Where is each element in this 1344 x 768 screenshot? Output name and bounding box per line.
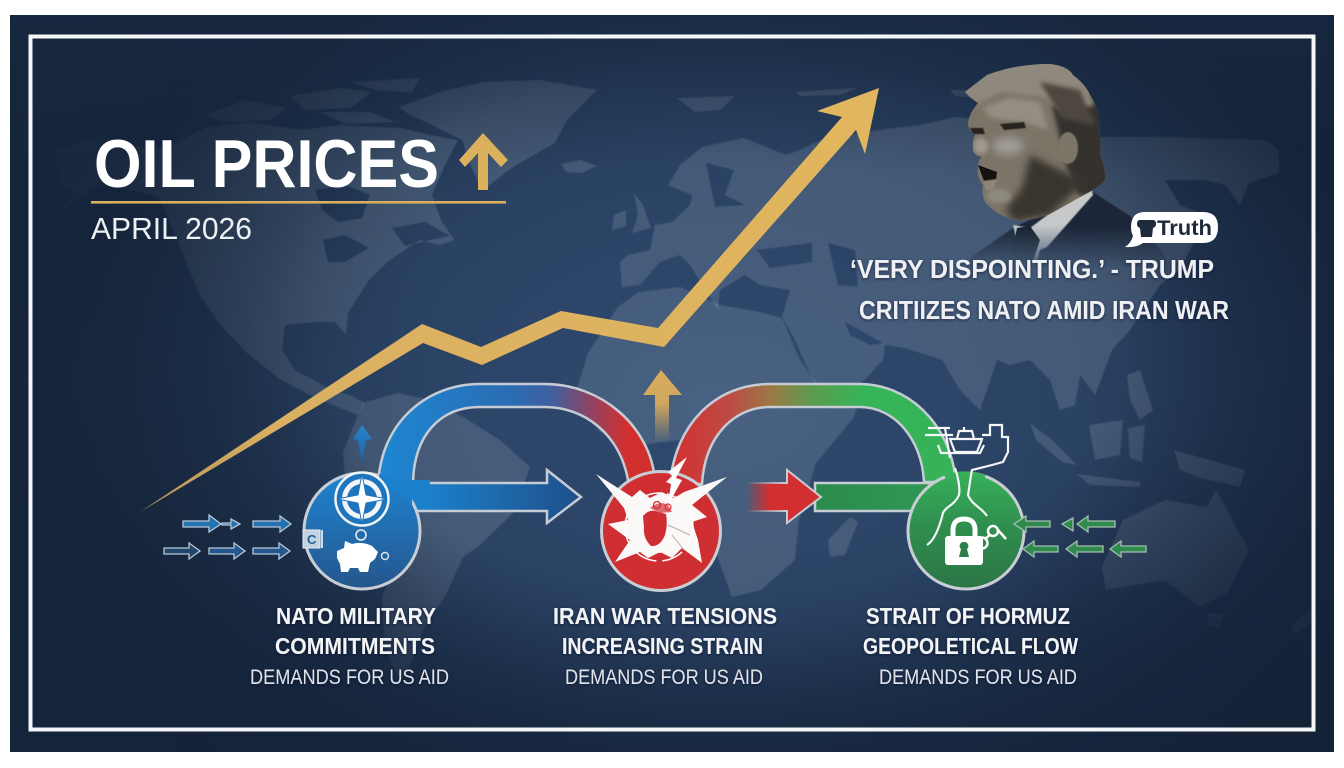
arctic islands [205, 78, 420, 124]
label: hormuz [863, 603, 1078, 689]
arrow: blue upward [353, 425, 372, 464]
nose highlight [974, 138, 988, 154]
social badge: truth [1125, 212, 1218, 247]
label: nato: DEMANDS FOR US AID [250, 666, 449, 689]
label: nato: NATO MILITARY [276, 603, 436, 629]
flow: nato to iran [378, 384, 655, 523]
forehead highlight [982, 98, 1048, 130]
icon: ship and drone routes [925, 425, 1008, 545]
node: nato [303, 472, 420, 589]
southeast asia islands [1030, 370, 1245, 487]
cheek highlight [993, 137, 1023, 155]
flow: iran to hormuz [670, 384, 956, 523]
icon: square token: C [307, 532, 317, 547]
south america [343, 393, 530, 680]
jacket [970, 192, 1166, 262]
label: iran [553, 603, 777, 689]
back hair [1052, 95, 1110, 195]
label: hormuz: DEMANDS FOR US AID [879, 666, 1077, 689]
icon: coin [356, 530, 366, 540]
world map [55, 78, 1317, 680]
label: hormuz: STRAIT OF HORMUZ [866, 603, 1070, 629]
hair streak [1040, 82, 1095, 125]
label: iran: DEMANDS FOR US AID [565, 666, 763, 689]
arch junction into circle [945, 473, 985, 477]
arrow: gold upward strain [643, 370, 682, 442]
iceland [561, 160, 597, 173]
icon: truth glyph [1137, 220, 1156, 237]
icon: gold up arrow [459, 133, 508, 190]
portrait [960, 58, 1170, 270]
icon: piggy bank [337, 541, 378, 572]
title: oil prices: OIL PRICES [94, 126, 439, 202]
necktie [1015, 226, 1040, 265]
hair top [965, 64, 1096, 110]
blue to red arch [378, 384, 655, 510]
green circle [908, 473, 1024, 589]
blue circle [304, 473, 420, 589]
node: iran [596, 457, 727, 590]
badge label: Truth [1157, 217, 1212, 240]
jaw shadow [1005, 155, 1085, 222]
red circle [602, 472, 720, 590]
north america [55, 122, 458, 415]
arrows: inbound blue flows [164, 515, 291, 559]
title underline [91, 201, 506, 204]
label: iran: INCREASING STRAIN [562, 633, 763, 659]
lower lip [983, 179, 997, 190]
chin highlight [987, 189, 1011, 203]
line chart arrow: rising oil price [140, 88, 879, 512]
madagascar [828, 517, 858, 557]
title block [91, 126, 508, 246]
green horizontal band [815, 483, 935, 511]
red to green arch [670, 384, 956, 484]
mouth [978, 165, 997, 181]
tasmania and new zealand [1207, 610, 1317, 635]
head [965, 64, 1106, 220]
british isles [612, 193, 651, 233]
eurasia [620, 117, 1279, 410]
arch junction into circle [379, 474, 413, 505]
icon: small coin [382, 552, 388, 560]
quote line 1: ‘VERY DISPOINTING.’ - TRUMP [850, 254, 1214, 284]
red arrow [746, 470, 821, 523]
arctic russia [677, 88, 975, 112]
arrows: inbound green flows [1014, 516, 1146, 557]
quote headline [850, 254, 1229, 325]
icon: padlock [945, 519, 983, 565]
subtitle: date: APRIL 2026 [91, 211, 252, 246]
label: iran: IRAN WAR TENSIONS [553, 603, 777, 629]
label: hormuz: GEOPOLETICAL FLOW [863, 633, 1078, 659]
eyes and brow [970, 122, 1026, 134]
quote line 2: CRITIIZES NATO AMID IRAN WAR [859, 295, 1229, 325]
blue horizontal arrow [413, 470, 581, 523]
label: nato [250, 603, 449, 689]
australia [1102, 490, 1249, 607]
icon: nato compass [336, 472, 388, 526]
greenland [399, 80, 597, 190]
africa [575, 287, 858, 597]
icon: chain link [976, 526, 1006, 548]
ear [1058, 132, 1078, 164]
shirt collar [1013, 183, 1093, 265]
label: nato: COMMITMENTS [275, 633, 435, 659]
icon: explosion [596, 457, 727, 563]
node: hormuz [908, 425, 1024, 589]
